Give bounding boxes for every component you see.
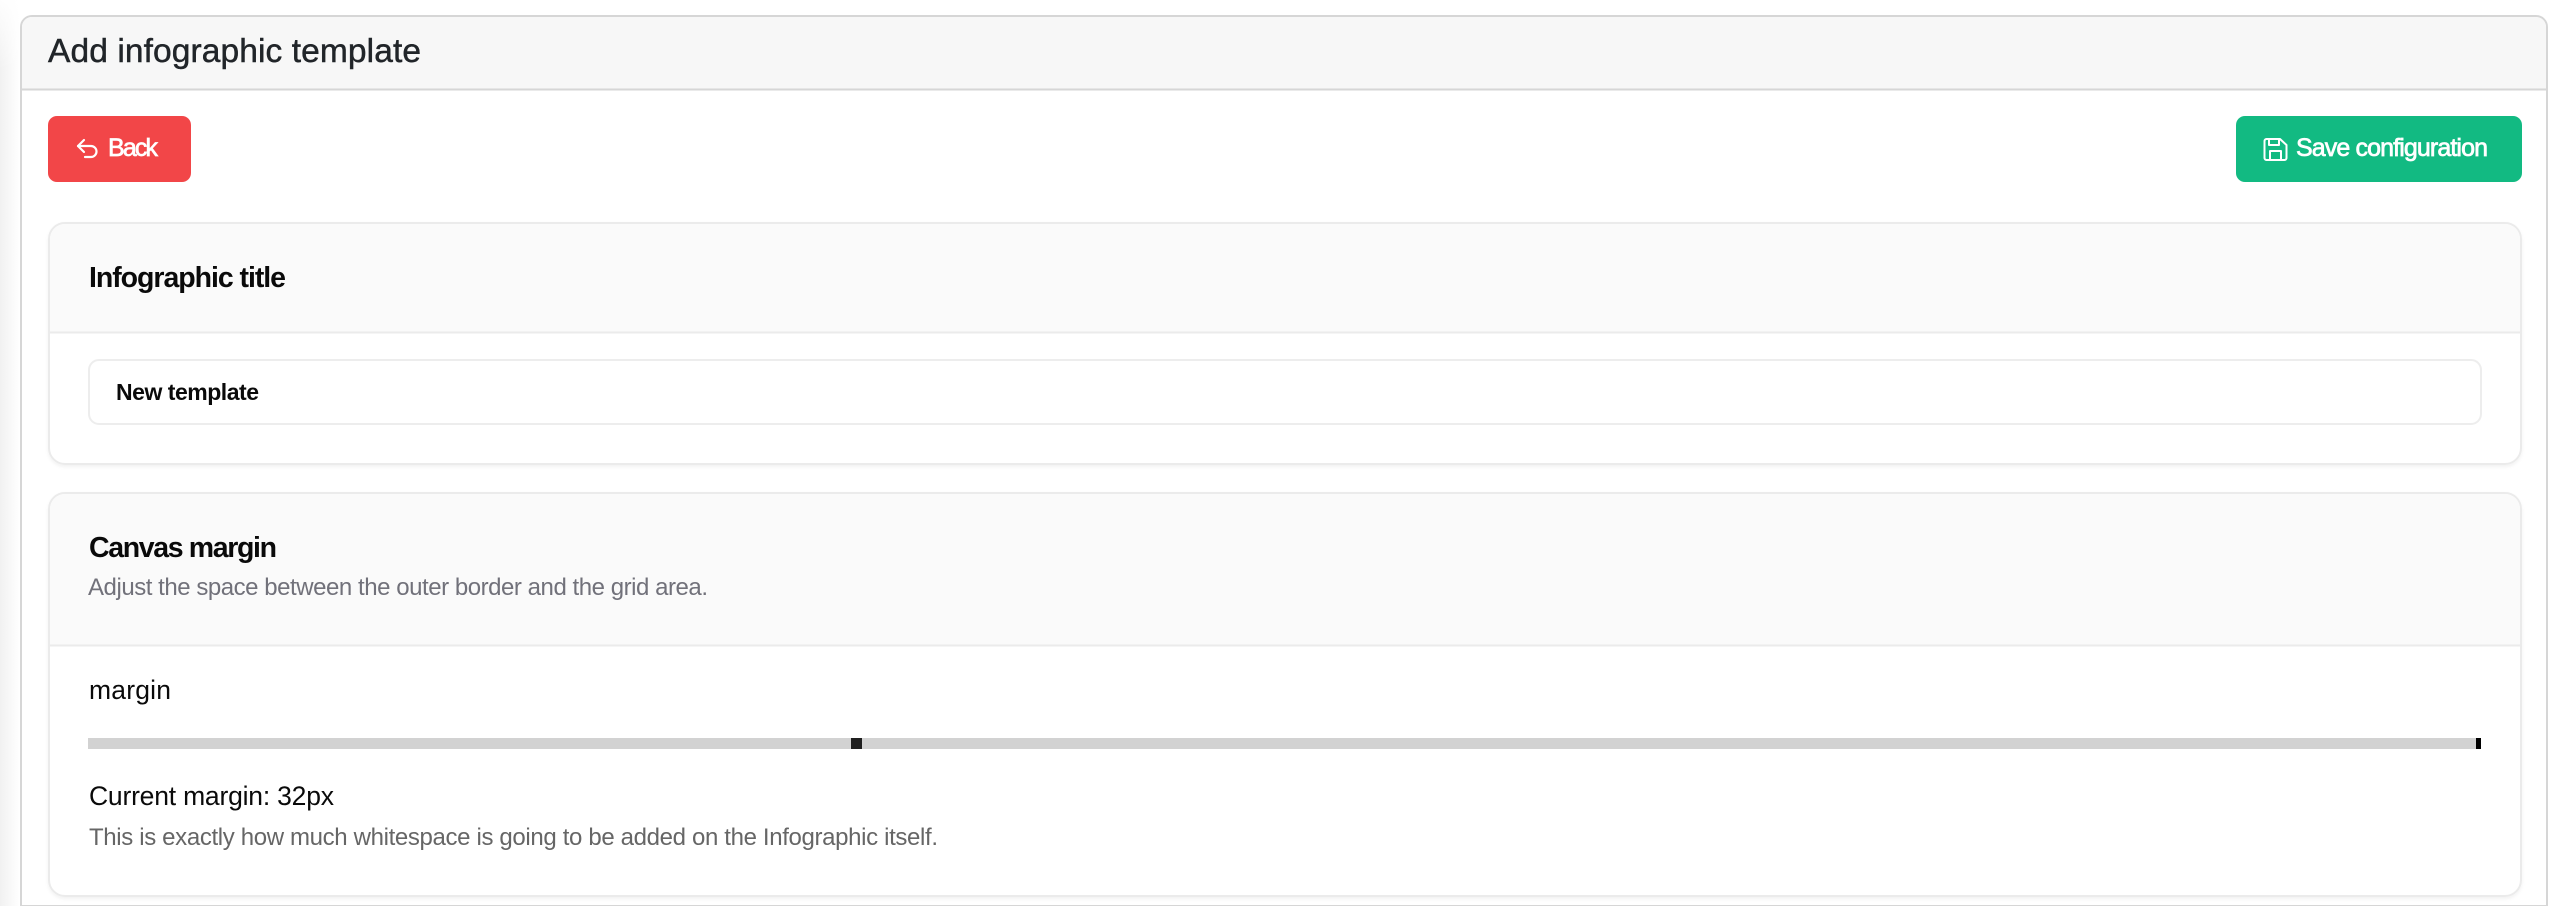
title input field [89,360,2481,424]
back button [48,116,191,182]
panel header: infographic title [49,224,2521,334]
title input field: New template [116,379,259,405]
margin slider [88,738,2481,749]
panel: canvas margin [49,493,2521,896]
panel heading: Canvas margin [89,532,277,564]
save configuration button: Save configuration [2296,134,2488,162]
current margin value: Current margin: 32px [89,781,334,811]
panel header: canvas margin [49,494,2521,646]
save configuration button [2236,116,2522,182]
margin field label: margin [89,675,171,705]
panel: infographic title [49,223,2521,464]
page heading: Add infographic template [48,33,421,70]
panel heading: Infographic title [89,262,286,294]
icon: undo arrow [78,140,97,157]
panel description: Adjust the space between the outer border and the grid area. [88,574,708,601]
margin help text: This is exactly how much whitespace is going to be added on the Infographic itself. [89,824,938,851]
icon: floppy disk [2264,139,2286,160]
page header bar [21,17,2547,90]
back button: Back [108,134,158,162]
